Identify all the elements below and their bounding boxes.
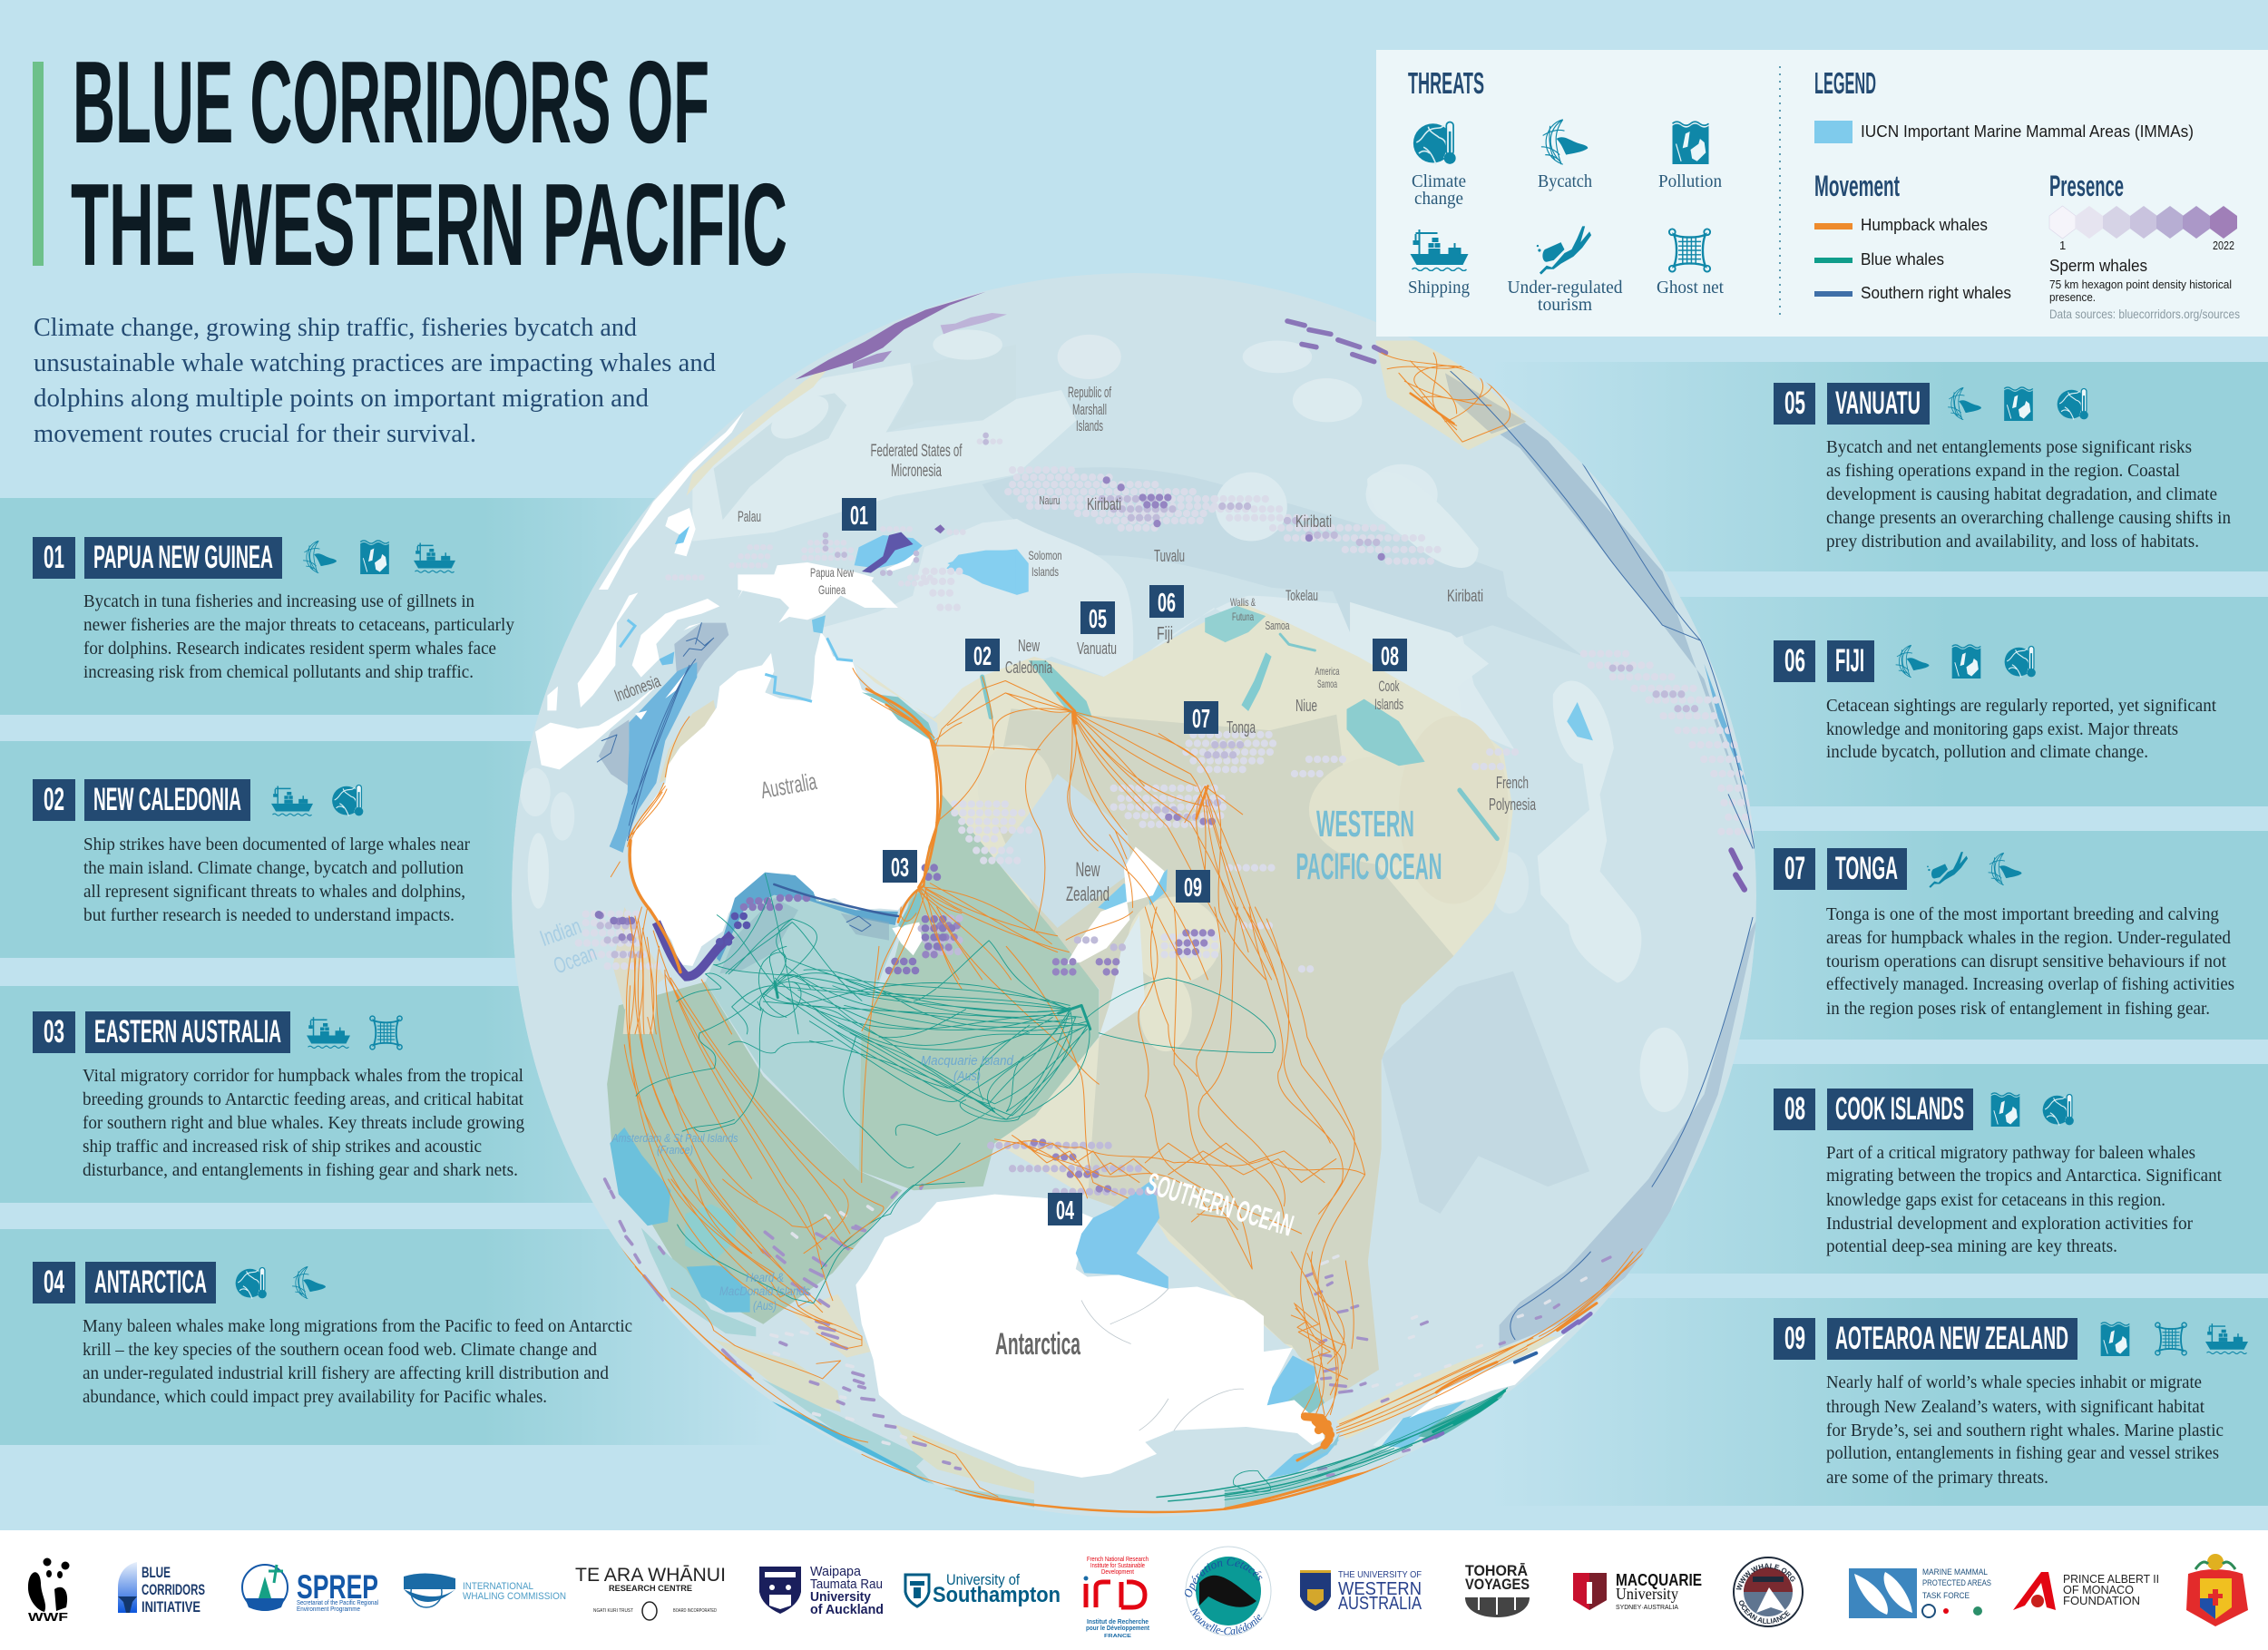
panel: 01 Papua New Guinea: newer fisheries are the major threats to cetaceans, particularly bbox=[83, 615, 514, 635]
map labels: America bbox=[1315, 665, 1340, 678]
map number markers bbox=[842, 498, 1407, 1225]
map labels: Samoa bbox=[1265, 619, 1290, 632]
map labels: Kiribati bbox=[1447, 587, 1483, 605]
Australia coast tracks bbox=[597, 623, 962, 1034]
logo: University of Southampton: University of bbox=[946, 1571, 1020, 1588]
logo: Marine Mammal Protected Areas Task Force bbox=[1849, 1567, 1991, 1618]
panel: 07 Tonga: tourism operations can disrupt sensitive behaviours if not bbox=[1826, 952, 2226, 971]
ocean labels: SOUTHERN OCEAN bbox=[1143, 1166, 1297, 1243]
humpback tracks north bbox=[866, 353, 1510, 980]
logo: WWF bbox=[28, 1558, 69, 1624]
logo: University of Auckland bbox=[759, 1564, 884, 1617]
map labels: New bbox=[1018, 637, 1041, 655]
logo: SPREP: Secretariat of the Pacific Regional bbox=[297, 1600, 378, 1606]
threat labels bbox=[1408, 171, 1724, 315]
panel: 02 New Caledonia: all represent significant threats to whales and dolphins, bbox=[83, 882, 465, 902]
map labels: Futuna bbox=[1232, 610, 1254, 623]
intro text bbox=[34, 313, 716, 448]
map labels: Niue bbox=[1295, 697, 1317, 715]
panel: 01 Papua New Guinea bbox=[33, 537, 514, 682]
ocean labels: WESTERN bbox=[1316, 803, 1414, 845]
panel: 06 Fiji: knowledge and monitoring gaps exist. Major threats bbox=[1826, 719, 2178, 739]
map labels: Nauru bbox=[1040, 493, 1060, 507]
legend: presence: 2022 bbox=[2213, 239, 2234, 252]
panel: 09 Aotearoa New Zealand: 09 bbox=[1784, 1321, 1805, 1356]
map labels: Tokelau bbox=[1286, 587, 1318, 604]
IMMAs north bbox=[947, 341, 1526, 913]
panel: 04 Antarctica: abundance, which could impact prey availability for Pacific whales. bbox=[83, 1387, 547, 1407]
panel: 07 Tonga: in the region poses risk of entanglement in fishing gear. bbox=[1826, 999, 2210, 1019]
ocean zones northwest limb bbox=[687, 329, 1077, 542]
limb tracks east bbox=[1451, 371, 1755, 1186]
logo: WWF: WWF bbox=[28, 1610, 68, 1624]
logo: University of Auckland: of Auckland bbox=[810, 1602, 884, 1617]
map labels: Vanuatu bbox=[1077, 639, 1117, 658]
logo: IRD: Institut de Recherche bbox=[1087, 1619, 1149, 1626]
icon: bycatch bbox=[1541, 120, 1588, 164]
southeast limb tracks bbox=[1225, 1249, 1645, 1508]
legend: movement: Movement bbox=[1814, 170, 1900, 202]
map labels: Palau bbox=[738, 508, 761, 525]
intro text: unsustainable whale watching practices are impacting whales and bbox=[34, 348, 716, 377]
southwest limb tracks bbox=[599, 1179, 1034, 1506]
intro text: dolphins along multiple points on important migration and bbox=[34, 384, 649, 413]
panel: 05 Vanuatu: development is causing habitat degradation, and climate bbox=[1826, 484, 2217, 504]
logo: Macquarie University: University bbox=[1616, 1585, 1678, 1603]
logo: University of Western Australia: AUSTRALIA bbox=[1338, 1594, 1422, 1614]
panel: 05 Vanuatu: Bycatch and net entanglements pose significant risks bbox=[1826, 437, 2192, 457]
logo: Ocean Alliance: OCEAN ALLIANCE bbox=[1739, 1600, 1791, 1624]
panel: 09 Aotearoa New Zealand bbox=[1774, 1318, 2248, 1488]
panel: 07 Tonga: 07 bbox=[1784, 851, 1805, 886]
legend: presence: Presence bbox=[2049, 170, 2124, 202]
panel: 02 New Caledonia: Ship strikes have been documented of large whales near bbox=[83, 835, 470, 854]
map number markers: 05 bbox=[1089, 605, 1107, 634]
logo: Te Ara Whanui bbox=[575, 1565, 726, 1620]
ocean labels: (France) bbox=[657, 1143, 693, 1157]
map labels: Fiji bbox=[1157, 624, 1173, 644]
threats heading: THREATS bbox=[1408, 66, 1484, 100]
logo: SPREP bbox=[242, 1565, 378, 1613]
panel: 09 Aotearoa New Zealand: through New Zealand’s waters, with significant habitat bbox=[1826, 1397, 2204, 1417]
panel: 08 Cook Islands bbox=[1774, 1089, 2222, 1256]
logo: Prince Albert II of Monaco Foundation: PRINCE ALBERT II bbox=[2063, 1572, 2159, 1586]
logo: Blue Corridors Initiative: CORRIDORS bbox=[142, 1581, 205, 1598]
right section bands bbox=[1488, 362, 2268, 1506]
panel: 04 Antarctica: Many baleen whales make long migrations from the Pacific to feed on Antarctic bbox=[83, 1316, 632, 1336]
logo: International Whaling Commission bbox=[404, 1573, 566, 1607]
logo: IRD: pour le Développement bbox=[1086, 1626, 1150, 1632]
map labels: Kiribati bbox=[1295, 513, 1332, 531]
panel: 06 Fiji: 06 bbox=[1784, 643, 1805, 679]
ocean labels: Heard & bbox=[746, 1270, 784, 1284]
logo: IRD: Institute for Sustainable bbox=[1090, 1563, 1145, 1569]
threat labels: change bbox=[1414, 189, 1463, 209]
threat labels: Bycatch bbox=[1538, 171, 1592, 191]
panel: 04 Antarctica: 04 bbox=[44, 1264, 64, 1300]
logo: University of Auckland: Taumata Rau bbox=[810, 1577, 883, 1592]
ocean labels bbox=[537, 803, 1442, 1362]
map labels: Solomon bbox=[1029, 548, 1061, 562]
panel: 03 Eastern Australia: ship traffic and increased risk of ship strikes and acoustic bbox=[83, 1137, 482, 1157]
legend: presence: 75 km hexagon point density historical bbox=[2049, 278, 2232, 291]
IMMAs east bbox=[1457, 664, 1747, 804]
panel: 01 Papua New Guinea: for dolphins. Research indicates resident sperm whales face bbox=[83, 639, 496, 659]
panel: threats and legend bbox=[1376, 50, 2268, 337]
logo: Marine Mammal Protected Areas Task Force: TASK FORCE bbox=[1922, 1591, 1970, 1600]
panel: 03 Eastern Australia: EASTERN AUSTRALIA bbox=[94, 1014, 281, 1050]
logo: University of Southampton bbox=[905, 1571, 1061, 1607]
panel: 05 Vanuatu: change presents an overarching challenge causing shifts in bbox=[1826, 508, 2231, 528]
panel: 05 Vanuatu: VANUATU bbox=[1835, 386, 1921, 421]
logo: Tonga coat of arms bbox=[2186, 1554, 2248, 1626]
panel: 01 Papua New Guinea: increasing risk from chemical pollutants and ship traffic. bbox=[83, 662, 474, 682]
southern limb strips and beige reach bbox=[1225, 1252, 1567, 1508]
panel: 07 Tonga: effectively managed. Increasing overlap of fishing activities bbox=[1826, 974, 2234, 994]
logo: University of Western Australia: WESTERN bbox=[1338, 1579, 1422, 1599]
map labels: Zealand bbox=[1066, 883, 1110, 905]
map number markers: 03 bbox=[891, 854, 909, 883]
panel: 05 Vanuatu: 05 bbox=[1784, 386, 1805, 421]
whale tracks Southern Ocean bbox=[624, 907, 1497, 1512]
legend: IMMA swatch bbox=[1814, 121, 2194, 143]
left section bands bbox=[0, 498, 780, 1445]
map number markers: 04 bbox=[1056, 1196, 1074, 1225]
panel: 03 Eastern Australia: breeding grounds to Antarctic feeding areas, and critical habitat bbox=[83, 1089, 523, 1109]
intro text: movement routes crucial for their survival. bbox=[34, 419, 476, 448]
panel: 02 New Caledonia: 02 bbox=[44, 782, 64, 817]
map number markers: 01 bbox=[850, 502, 868, 531]
logo: Operation Cetaces bbox=[1185, 1546, 1272, 1636]
Southern Ocean green hulls bbox=[607, 794, 1099, 1324]
panel: 02 New Caledonia: NEW CALEDONIA bbox=[93, 782, 241, 817]
threat labels: Pollution bbox=[1658, 171, 1722, 191]
logo: Marine Mammal Protected Areas Task Force: PROTECTED AREAS bbox=[1922, 1578, 1991, 1587]
panel: threats and legend: LEGEND bbox=[1814, 66, 1876, 100]
panel: 08 Cook Islands: COOK ISLANDS bbox=[1835, 1091, 1964, 1127]
icon: pollution bbox=[1673, 122, 1709, 164]
logo: Tohora Voyages bbox=[1465, 1562, 1530, 1617]
logo: IRD: French National Research bbox=[1087, 1557, 1149, 1563]
northwest limb land, Bismarck and purple smudges bbox=[599, 292, 1016, 592]
map labels: Tonga bbox=[1227, 718, 1256, 737]
light patch south of New Zealand bbox=[1099, 915, 1145, 1037]
icon: shipping bbox=[1410, 229, 1468, 270]
panel: 06 Fiji: FIJI bbox=[1835, 643, 1864, 679]
foreshortened hexagons southwest limb bbox=[605, 1179, 960, 1469]
panel: 07 Tonga: TONGA bbox=[1835, 851, 1898, 886]
panel: 02 New Caledonia: the main island. Climate change, bycatch and pollution bbox=[83, 858, 464, 878]
panel: 05 Vanuatu: as fishing operations expand in the region. Coastal bbox=[1826, 461, 2180, 481]
panel: 05 Vanuatu bbox=[1774, 383, 2231, 552]
legend: movement: Southern right whales bbox=[1861, 284, 2011, 302]
panel: 01 Papua New Guinea: PAPUA NEW GUINEA bbox=[93, 540, 273, 575]
threat labels: tourism bbox=[1538, 295, 1592, 315]
map labels: Marshall bbox=[1072, 401, 1107, 418]
panel: 04 Antarctica bbox=[33, 1262, 632, 1407]
map labels: Republic of bbox=[1068, 384, 1111, 401]
logo: Te Ara Whanui: TE ARA WHĀNUI bbox=[575, 1565, 726, 1586]
map labels: Indonesia bbox=[612, 672, 663, 706]
panel: 06 Fiji: Cetacean sightings are regularly reported, yet significant bbox=[1826, 696, 2216, 716]
threat labels: Ghost net bbox=[1657, 278, 1724, 298]
Indonesia, Australia and nearby coast bbox=[520, 574, 941, 1034]
logo: Blue Corridors Initiative: INITIATIVE bbox=[142, 1598, 200, 1616]
title bbox=[71, 37, 787, 290]
panel: 09 Aotearoa New Zealand: are some of the primary threats. bbox=[1826, 1468, 2048, 1488]
foreshortened hexagons southeast limb bbox=[1306, 1256, 1610, 1476]
panel: 03 Eastern Australia: 03 bbox=[44, 1014, 64, 1050]
threat labels: Shipping bbox=[1408, 278, 1470, 298]
panel: 03 Eastern Australia bbox=[33, 1011, 524, 1180]
New Zealand land bbox=[1066, 847, 1165, 964]
logo: Macquarie University: SYDNEY·AUSTRALIA bbox=[1616, 1605, 1678, 1611]
logo: Te Ara Whanui: NGATI KURI TRUST bbox=[593, 1608, 633, 1614]
logo: Ocean Alliance: WWW.WHALE.ORG bbox=[1736, 1564, 1795, 1590]
ocean labels: Amsterdam & St Paul Islands bbox=[611, 1131, 738, 1145]
panel: 08 Cook Islands: 08 bbox=[1784, 1091, 1805, 1127]
map number markers: 06 bbox=[1158, 589, 1176, 618]
map number markers: 09 bbox=[1184, 874, 1202, 903]
hexagons south coast of Australia bbox=[599, 868, 953, 971]
legend: movement: Humpback whales bbox=[1861, 216, 1988, 234]
map labels: Islands bbox=[1076, 417, 1103, 434]
panel: 05 Vanuatu: prey distribution and availability, and loss of habitats. bbox=[1826, 532, 2199, 552]
map labels: Kiribati bbox=[1087, 495, 1121, 513]
map number markers: 08 bbox=[1381, 642, 1399, 671]
logo: Macquarie University: MACQUARIE bbox=[1616, 1571, 1702, 1589]
ocean zones east bbox=[1293, 379, 1688, 1214]
threat labels: Climate bbox=[1412, 171, 1466, 191]
ocean labels: Ocean bbox=[551, 941, 600, 979]
map labels: Tuvalu bbox=[1154, 547, 1185, 565]
panel: 07 Tonga bbox=[1774, 848, 2234, 1019]
right limb crescents bbox=[1499, 423, 1756, 1348]
logo: Operation Cetaces: Nouvelle-Calédonie bbox=[1190, 1607, 1262, 1635]
panel: 08 Cook Islands: knowledge gaps exist for cetaceans in this region. bbox=[1826, 1190, 2165, 1210]
beige western Pacific hull and inner hull bbox=[855, 603, 1513, 1382]
legend: IMMA swatch: IUCN Important Marine Mammal Areas (IMMAs) bbox=[1861, 122, 2194, 141]
map labels: Papua New bbox=[810, 565, 855, 580]
panel: 07 Tonga: areas for humpback whales in the region. Under-regulated bbox=[1826, 928, 2231, 948]
logo: Te Ara Whanui: BOARD INCORPORATED bbox=[673, 1608, 717, 1614]
map number markers: 02 bbox=[973, 642, 992, 671]
IMMAs south and Antarctica land bbox=[610, 1128, 1315, 1478]
legend: presence: 1 bbox=[2059, 239, 2066, 252]
legend: presence: Sperm whales bbox=[2049, 257, 2147, 275]
green title bar bbox=[33, 62, 44, 266]
map labels: Cook bbox=[1379, 678, 1400, 695]
ocean labels: (Aus) bbox=[953, 1069, 981, 1084]
ocean sphere bbox=[512, 273, 1756, 1518]
logo: Ocean Alliance bbox=[1733, 1557, 1804, 1627]
panel: 09 Aotearoa New Zealand: for Bryde’s, sei and southern right whales. Marine plastic bbox=[1826, 1421, 2224, 1440]
logo: University of Western Australia: THE UNIVERSITY OF bbox=[1338, 1570, 1422, 1580]
map labels: French bbox=[1496, 774, 1529, 792]
ocean labels: Indian bbox=[537, 913, 584, 952]
logo: Macquarie University bbox=[1573, 1571, 1702, 1611]
sperm whale presence hexagons bbox=[579, 321, 1756, 1192]
Tasman Sea zone bbox=[993, 774, 1133, 928]
logo: Blue Corridors Initiative: BLUE bbox=[142, 1564, 171, 1581]
map labels: Wallis & bbox=[1230, 596, 1256, 609]
panel: 02 New Caledonia: but further research is needed to understand impacts. bbox=[83, 905, 455, 925]
title: BLUE CORRIDORS OF bbox=[73, 37, 709, 168]
panel: 09 Aotearoa New Zealand: AOTEAROA NEW ZEALAND bbox=[1835, 1321, 2068, 1356]
panel: 08 Cook Islands: Part of a critical migratory pathway for baleen whales bbox=[1826, 1143, 2195, 1163]
logo: Prince Albert II of Monaco Foundation: FOUNDATION bbox=[2063, 1594, 2140, 1607]
logo: International Whaling Commission: INTERNATIONAL bbox=[463, 1581, 533, 1592]
logo: SPREP: Environment Programme bbox=[297, 1606, 360, 1613]
ocean zones north bbox=[820, 335, 1514, 749]
logo: SPREP: SPREP bbox=[297, 1568, 378, 1606]
ocean labels: (Aus) bbox=[753, 1298, 777, 1313]
threat labels: Under-regulated bbox=[1508, 278, 1622, 298]
panel: 09 Aotearoa New Zealand: pollution, entanglements in fishing gear and vessel strikes bbox=[1826, 1443, 2219, 1463]
panel: 04 Antarctica: ANTARCTICA bbox=[94, 1264, 207, 1300]
panel: 06 Fiji: include bycatch, pollution and climate change. bbox=[1826, 742, 2148, 762]
map labels: New bbox=[1076, 858, 1100, 881]
Antarctic peninsula bbox=[1246, 1382, 1339, 1463]
legend: movement bbox=[1814, 170, 2011, 302]
map labels: Caledonia bbox=[1005, 659, 1053, 677]
panel: 03 Eastern Australia: for southern right and blue whales. Key threats include growing bbox=[83, 1113, 524, 1133]
panel: 09 Aotearoa New Zealand: Nearly half of world’s whale species inhabit or migrate bbox=[1826, 1372, 2202, 1392]
legend: presence: Data sources: bluecorridors.org/sources bbox=[2049, 307, 2240, 321]
logo: Blue Corridors Initiative bbox=[118, 1562, 205, 1616]
map labels: Guinea bbox=[818, 582, 846, 597]
map labels: Polynesia bbox=[1489, 796, 1537, 814]
globe map bbox=[512, 273, 1758, 1518]
panel: 03 Eastern Australia: Vital migratory corridor for humpback whales from the tropical bbox=[83, 1066, 523, 1086]
ocean labels: Macquarie Island bbox=[921, 1053, 1014, 1069]
icon: under-regulated tourism bbox=[1537, 226, 1591, 275]
legend: presence bbox=[2049, 170, 2240, 321]
legend: presence: presence. bbox=[2049, 290, 2096, 304]
map number markers: 07 bbox=[1192, 705, 1210, 734]
logo: Tohora Voyages: VOYAGES bbox=[1465, 1576, 1530, 1593]
panel: 01 Papua New Guinea: 01 bbox=[44, 540, 64, 575]
logo: Te Ara Whanui: RESEARCH CENTRE bbox=[609, 1584, 692, 1593]
intro text: Climate change, growing ship traffic, fisheries bycatch and bbox=[34, 313, 637, 342]
panel: 08 Cook Islands: migrating between the tropics and Antarctica. Significant bbox=[1826, 1166, 2222, 1186]
footer strip bbox=[0, 1530, 2268, 1650]
logo: Tohora Voyages: TOHORĀ bbox=[1465, 1562, 1528, 1579]
legend: movement: Blue whales bbox=[1861, 250, 1944, 268]
map labels: Australia bbox=[758, 767, 819, 804]
logo: Marine Mammal Protected Areas Task Force: MARINE MAMMAL bbox=[1922, 1567, 1988, 1577]
map labels: Islands bbox=[1374, 696, 1403, 713]
logo: University of Auckland: University bbox=[810, 1589, 872, 1605]
ocean labels: MacDonald Islands bbox=[719, 1284, 810, 1298]
map labels: Federated States of bbox=[871, 442, 963, 461]
panel: 02 New Caledonia bbox=[33, 779, 470, 925]
ocean labels: PACIFIC OCEAN bbox=[1295, 845, 1442, 887]
panel: 08 Cook Islands: Industrial development and exploration activities for bbox=[1826, 1214, 2193, 1234]
icon: climate change bbox=[1413, 122, 1456, 164]
logo: Prince Albert II of Monaco Foundation: OF MONACO bbox=[2063, 1583, 2134, 1596]
panel: 07 Tonga: Tonga is one of the most important breeding and calving bbox=[1826, 904, 2219, 924]
logo: University of Auckland: Waipapa bbox=[810, 1564, 862, 1579]
panel: 08 Cook Islands: potential deep-sea mining are key threats. bbox=[1826, 1236, 2117, 1256]
map labels: Samoa bbox=[1317, 678, 1337, 690]
map labels: Micronesia bbox=[891, 462, 942, 481]
ocean labels: Antarctica bbox=[995, 1327, 1081, 1362]
title: THE WESTERN PACIFIC bbox=[71, 160, 787, 290]
logo: Prince Albert II of Monaco Foundation bbox=[2013, 1572, 2159, 1610]
map labels bbox=[612, 384, 1537, 905]
logo: IRD bbox=[1083, 1557, 1150, 1639]
southwest limb hulls bbox=[641, 1227, 1034, 1508]
logo: Operation Cetaces: Opération Cétacés bbox=[1185, 1558, 1263, 1597]
logo: University of Western Australia bbox=[1300, 1570, 1422, 1614]
icon: ghost net bbox=[1669, 229, 1710, 272]
logo: IRD: FRANCE bbox=[1104, 1634, 1132, 1639]
logo: University of Southampton: Southampton bbox=[933, 1583, 1061, 1607]
panel: 04 Antarctica: an under-regulated industrial krill fishery are affecting krill distribution and bbox=[83, 1363, 609, 1383]
panel: 01 Papua New Guinea: Bycatch in tuna fisheries and increasing use of gillnets in bbox=[83, 591, 474, 611]
logo: International Whaling Commission: WHALING COMMISSION bbox=[463, 1591, 566, 1602]
panel: 04 Antarctica: krill – the key species of the southern ocean food web. Climate change and bbox=[83, 1340, 597, 1360]
panel: 06 Fiji bbox=[1774, 640, 2216, 762]
map labels: Islands bbox=[1031, 564, 1059, 579]
logo: IRD: Development bbox=[1101, 1569, 1134, 1576]
panel: 03 Eastern Australia: disturbance, and entanglements in fishing gear and shark nets. bbox=[83, 1160, 518, 1180]
